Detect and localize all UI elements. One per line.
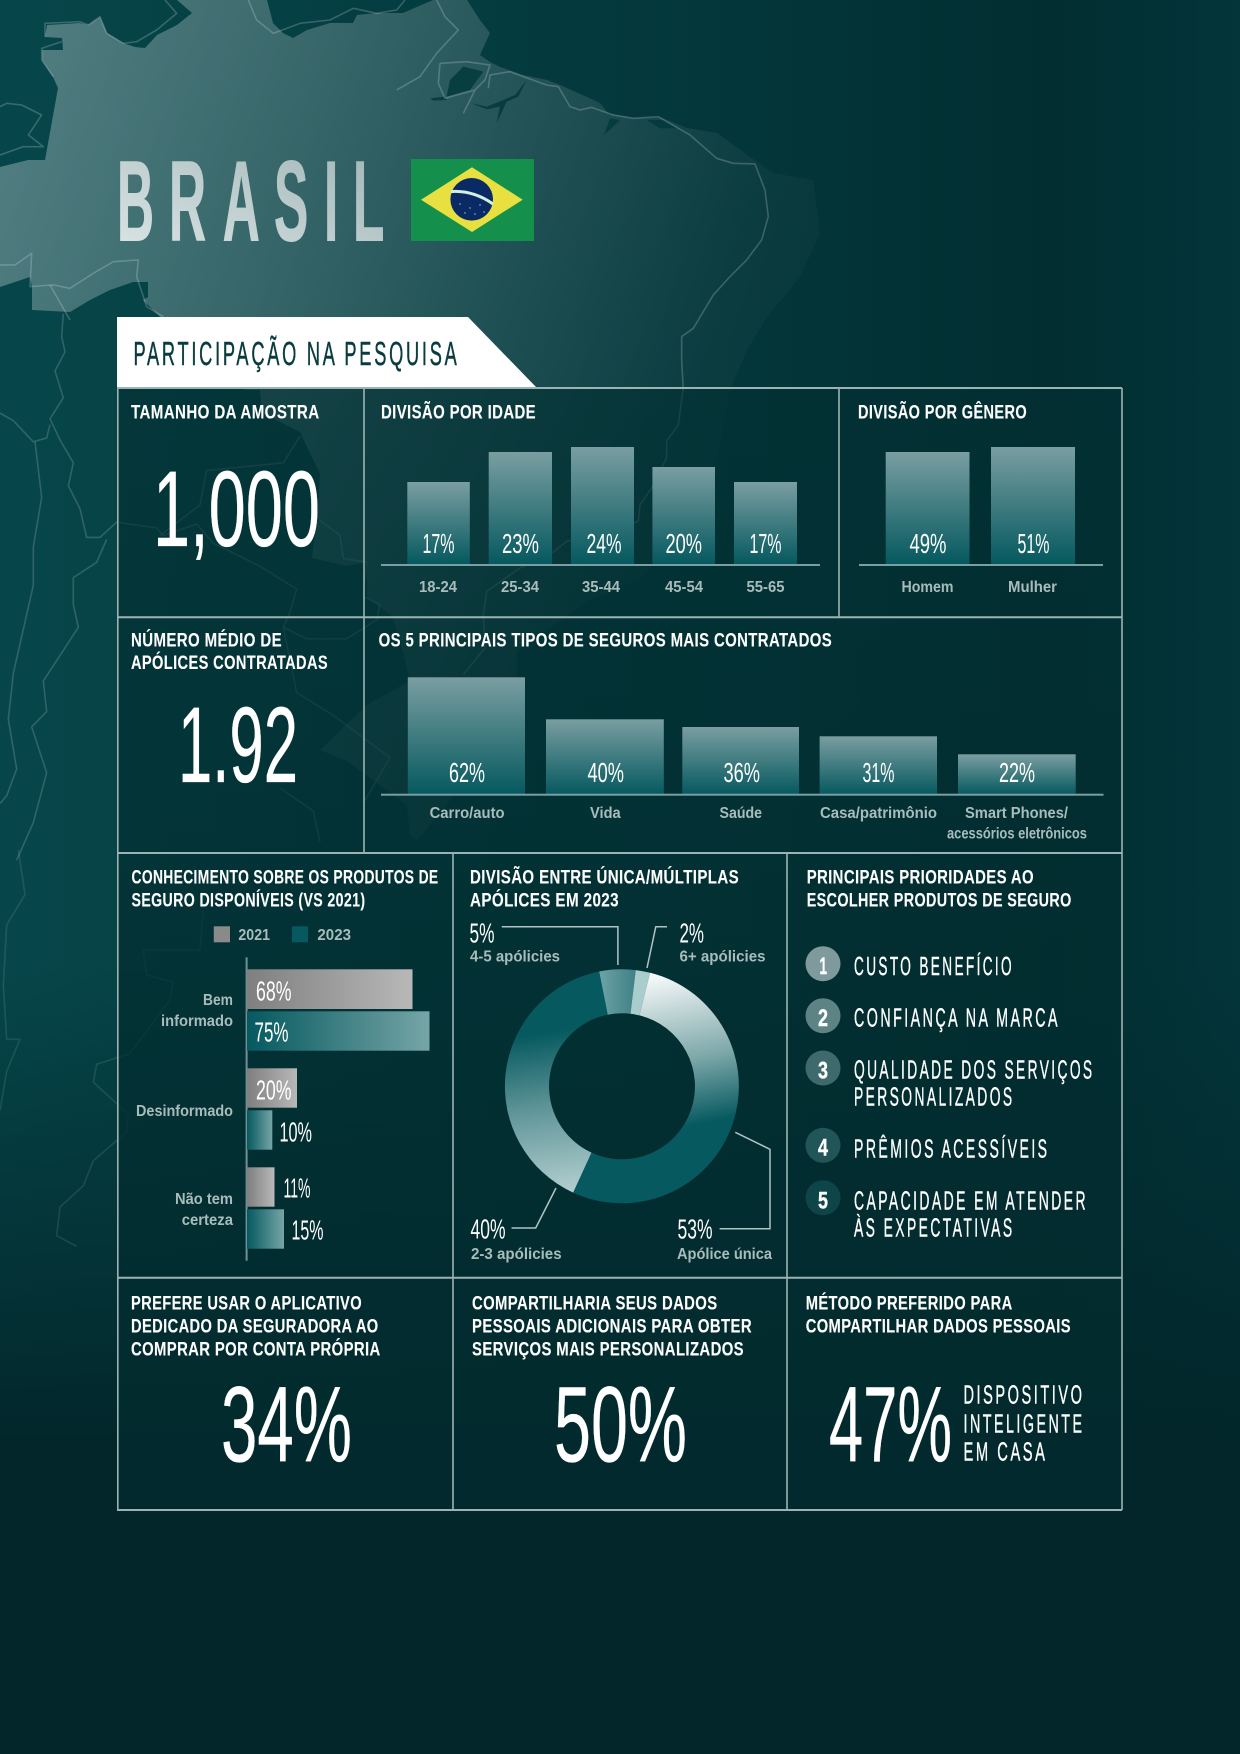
bar chart: insurance types: 36% <box>724 757 760 788</box>
bar chart: insurance types: acessórios eletrônicos <box>947 826 1087 843</box>
value: 47% <box>829 1364 952 1484</box>
priority 2: CONFIANÇA NA MARCA <box>854 1003 1060 1033</box>
legend <box>214 926 351 944</box>
heading: APÓLICES EM 2023 <box>470 888 619 912</box>
heading <box>470 864 739 912</box>
priority 4 <box>806 1128 1050 1163</box>
panel: product knowledge <box>132 866 438 1261</box>
bar chart: insurance types: Smart Phones/ <box>965 805 1069 822</box>
heading: DIVISÃO POR GÊNERO <box>858 400 1027 424</box>
bar chart: insurance types: 22% <box>999 757 1035 788</box>
section banner <box>117 317 536 387</box>
panel: sample size <box>131 402 320 569</box>
panel: gender split <box>858 400 1103 596</box>
value: 50% <box>554 1364 687 1484</box>
callout: 53%: Apólice única <box>677 1246 772 1263</box>
panel: would share data <box>472 1293 752 1484</box>
priority 1: CUSTO BENEFÍCIO <box>854 951 1014 981</box>
legend: 2021 <box>238 927 270 944</box>
bar chart: knowledge: Não tem <box>175 1191 233 1208</box>
bar chart: knowledge: 15% <box>292 1214 324 1245</box>
bar chart: knowledge: 75% <box>254 1017 288 1048</box>
priority 4: PRÊMIOS ACESSÍVEIS <box>854 1133 1050 1163</box>
description <box>964 1379 1084 1467</box>
heading: SEGURO DISPONÍVEIS (VS 2021) <box>132 889 366 912</box>
callout: 2% <box>680 917 766 966</box>
bar chart: gender <box>859 447 1103 596</box>
callout: 5%: 5% <box>470 917 494 948</box>
description: INTELIGENTE <box>964 1408 1084 1438</box>
bar chart: knowledge: 11% <box>284 1173 310 1204</box>
priority 4: 4 <box>818 1135 828 1162</box>
bar chart: age: 20% <box>666 528 702 559</box>
callout: 5%: 4-5 apólicies <box>470 949 560 966</box>
bar chart: age: 45-54 <box>665 579 703 596</box>
priority 1: 1 <box>820 953 827 980</box>
callout: 40%: 2-3 apólicies <box>471 1246 562 1263</box>
priority 2: 2 <box>818 1005 828 1032</box>
bar chart: gender: Mulher <box>1008 579 1057 596</box>
bar chart: knowledge: informado <box>161 1013 233 1030</box>
background map of Brazil <box>0 0 820 1246</box>
heading: OS 5 PRINCIPAIS TIPOS DE SEGUROS MAIS CONTRATADOS <box>379 630 832 652</box>
bar chart: gender: 51% <box>1018 528 1050 559</box>
bar chart: knowledge: Bem <box>203 992 233 1009</box>
value: 1.92 <box>178 684 298 805</box>
bar chart: insurance types: Vida <box>590 805 621 822</box>
priority 3: PERSONALIZADOS <box>854 1082 1014 1112</box>
bar chart: knowledge: 68% <box>256 976 292 1007</box>
bar chart: insurance types: Casa/patrimônio <box>820 805 937 822</box>
section banner: PARTICIPAÇÃO NA PESQUISA <box>134 335 460 372</box>
bar chart: age <box>381 447 820 596</box>
priority 3: 3 <box>818 1057 828 1084</box>
heading: SERVIÇOS MAIS PERSONALIZADOS <box>472 1338 744 1360</box>
value: 1,000 <box>153 448 320 569</box>
bar chart: age: 55-65 <box>746 579 785 596</box>
bar chart: insurance types: 62% <box>449 757 485 788</box>
donut chart <box>505 969 739 1203</box>
heading <box>472 1293 752 1360</box>
heading: DIVISÃO POR IDADE <box>381 400 536 424</box>
heading: ESCOLHER PRODUTOS DE SEGURO <box>807 890 1072 912</box>
bar chart: gender: 49% <box>910 528 946 559</box>
bar chart: age: 35-44 <box>582 579 620 596</box>
panel: priorities <box>806 866 1094 1243</box>
heading: COMPRAR POR CONTA PRÓPRIA <box>131 1336 381 1360</box>
heading: DIVISÃO ENTRE ÚNICA/MÚLTIPLAS <box>470 864 739 888</box>
callout: 40% <box>470 1214 562 1263</box>
heading: TAMANHO DA AMOSTRA <box>131 402 320 424</box>
legend: 2023 <box>317 927 351 944</box>
heading: PREFERE USAR O APLICATIVO <box>131 1293 362 1315</box>
bar chart: knowledge: 20% <box>256 1074 292 1105</box>
callout: 53% <box>677 1214 772 1263</box>
bar chart: knowledge: 10% <box>280 1117 312 1148</box>
bar chart: insurance types <box>381 677 1104 843</box>
heading: PESSOAIS ADICIONAIS PARA OBTER <box>472 1315 752 1337</box>
bar chart: age: 17% <box>750 528 782 559</box>
panel: top 5 insurance types <box>379 630 1104 843</box>
heading <box>131 1293 381 1360</box>
panel background <box>117 388 1122 1510</box>
bar chart: knowledge <box>136 957 430 1261</box>
priority 5: 5 <box>818 1187 828 1214</box>
callout: 5% <box>470 917 560 966</box>
priority 5: ÀS EXPECTATIVAS <box>854 1213 1014 1243</box>
heading <box>807 866 1072 912</box>
heading: PRINCIPAIS PRIORIDADES AO <box>807 866 1034 888</box>
icon: Brazilian flag <box>411 159 534 241</box>
bar chart: insurance types: Carro/auto <box>430 805 505 822</box>
bar chart: insurance types: 31% <box>862 757 894 788</box>
priority 2 <box>806 998 1060 1033</box>
panel: average policies <box>131 628 328 805</box>
heading: DEDICADO DA SEGURADORA AO <box>131 1315 379 1337</box>
bar chart: insurance types: 40% <box>588 757 624 788</box>
bar chart: insurance types: Saúde <box>720 805 762 822</box>
heading: NÚMERO MÉDIO DE <box>131 628 282 652</box>
priority 1 <box>806 946 1014 981</box>
heading <box>131 628 328 674</box>
heading: CONHECIMENTO SOBRE OS PRODUTOS DE <box>132 866 438 888</box>
panel: single vs multiple policies <box>470 864 772 1263</box>
description: EM CASA <box>964 1437 1048 1467</box>
callout: 40%: 40% <box>470 1214 506 1245</box>
bar chart: age: 17% <box>422 528 454 559</box>
panel: prefers insurer app <box>131 1293 381 1484</box>
callout: 2%: 2% <box>680 917 704 948</box>
heading: COMPARTILHARIA SEUS DADOS <box>472 1293 718 1315</box>
bar chart: age: 25-34 <box>501 579 539 596</box>
heading <box>806 1292 1071 1337</box>
bar chart: knowledge: certeza <box>182 1212 233 1229</box>
panel: preferred sharing method <box>806 1292 1084 1484</box>
bar chart: age: 24% <box>586 528 622 559</box>
heading <box>132 866 438 912</box>
description: DISPOSITIVO <box>964 1379 1084 1409</box>
bar chart: age: 23% <box>502 528 539 559</box>
heading: MÉTODO PREFERIDO PARA <box>806 1292 1013 1315</box>
panel: age split <box>381 400 820 596</box>
callout: 2%: 6+ apólicies <box>680 949 766 966</box>
callout: 53%: 53% <box>678 1214 712 1245</box>
priority 5 <box>806 1180 1088 1243</box>
heading: COMPARTILHAR DADOS PESSOAIS <box>806 1315 1071 1337</box>
title: BRASIL <box>117 137 384 265</box>
heading: APÓLICES CONTRATADAS <box>131 650 328 674</box>
bar chart: gender: Homem <box>902 579 954 596</box>
priority 3 <box>806 1050 1094 1112</box>
value: 34% <box>221 1364 352 1484</box>
bar chart: age: 18-24 <box>419 579 457 596</box>
bar chart: knowledge: Desinformado <box>136 1103 233 1120</box>
leader lines <box>502 927 770 1229</box>
